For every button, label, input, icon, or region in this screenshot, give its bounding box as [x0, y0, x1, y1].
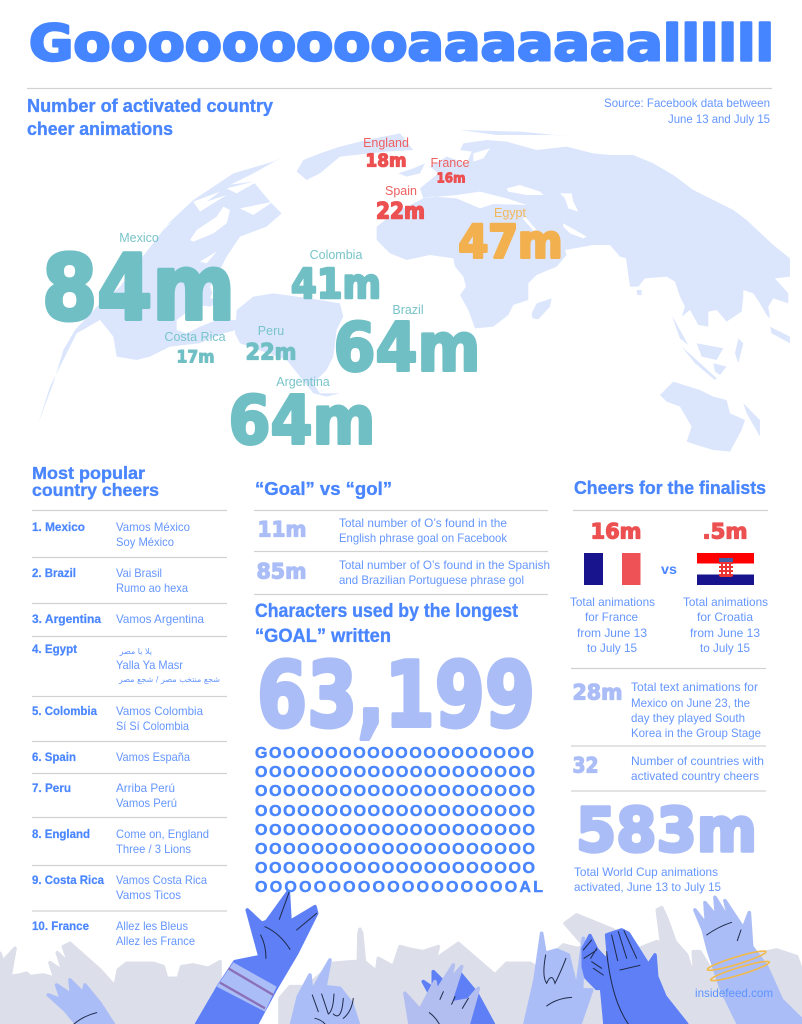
panel: most popular country cheers: [32, 463, 227, 948]
Croatia total: from June 13: [690, 626, 760, 640]
stat: 583m total: 583m: [576, 795, 757, 866]
icon: Croatian flag: [697, 553, 754, 585]
stat: 28m: [572, 680, 761, 740]
Croatia total: Total animations: [683, 595, 768, 609]
title: Goooooooooaaaaaaallllll: [29, 15, 774, 73]
map label: England: 18m: [366, 151, 406, 171]
source note: June 13 and July 15: [668, 112, 770, 126]
row: Spain: [32, 750, 190, 764]
map label: England: [363, 136, 409, 171]
Croatia total: for Croatia: [697, 610, 753, 624]
row: England: Come on, England: [116, 827, 209, 841]
stat: 583m total: activated, June 13 to July 15: [574, 880, 721, 894]
row: Spain: 6. Spain: [32, 752, 76, 764]
stat: 11m: Total number of O’s found in the: [339, 516, 507, 530]
subtitle: number of activated country cheer animations: Number of activated country: [27, 96, 273, 116]
map label: Peru: 22m: [246, 339, 296, 365]
map label: Mexico: Mexico: [119, 231, 159, 245]
versus label: vs: [661, 561, 677, 577]
longest goal text block: OOOOOOOOOOOOOOOOOOOO: [255, 783, 535, 800]
map label: Egypt: Egypt: [494, 206, 527, 220]
heading: characters used by longest goal: “GOAL” written: [255, 626, 391, 647]
map label: Peru: [246, 324, 296, 365]
heading: characters used by longest goal: [255, 601, 519, 647]
row: France: Allez les France: [116, 934, 195, 948]
light blue rock-sign hand: [525, 933, 592, 1024]
map label: Argentina: 64m: [228, 382, 376, 460]
row: Argentina: [32, 612, 204, 626]
heading: most popular country cheers: country cheers: [32, 480, 159, 500]
subtitle: number of activated country cheer animations: cheer animations: [27, 119, 173, 139]
map label: Brazil: Brazil: [392, 303, 424, 317]
subtitle: number of activated country cheer animations: [27, 96, 273, 139]
row: France: 10. France: [32, 921, 89, 933]
row: Brazil: [32, 566, 188, 595]
map label: Colombia: 41m: [291, 260, 381, 308]
row: England: [32, 827, 209, 856]
dark blue clapping hands: [583, 930, 687, 1024]
light blue hand with gold bracelets: [695, 897, 802, 1024]
row: Spain: Vamos España: [116, 750, 190, 764]
France total: Total animations: [570, 595, 655, 609]
panel: Goal vs gol: [254, 479, 550, 896]
map label: Brazil: 64m: [334, 308, 480, 386]
row: England: Three / 3 Lions: [116, 842, 191, 856]
row: Brazil: 2. Brazil: [32, 568, 76, 580]
map label: Spain: 22m: [376, 198, 425, 224]
stat: 28m: Korea in the Group Stage: [631, 726, 761, 740]
map label: Costa Rica: Costa Rica: [164, 330, 226, 344]
source note: Source: Facebook data between: [604, 96, 770, 110]
stat: 85m: and Brazilian Portuguese phrase gol: [339, 573, 524, 587]
stat: 28m: day they played South: [631, 711, 745, 725]
row: Costa Rica: Vamos Costa Rica: [116, 873, 207, 887]
row: Peru: Arriba Perú: [116, 781, 175, 795]
panel: cheers for the finalists: [570, 478, 768, 894]
map label: Costa Rica: [164, 330, 226, 366]
longest goal text block: OOOOOOOOOOOOOOOOOOOO: [255, 841, 535, 858]
map label: England: England: [363, 136, 409, 150]
stat: 32: [572, 753, 764, 783]
map label: Argentina: Argentina: [276, 375, 330, 389]
map label: Egypt: 47m: [458, 216, 562, 268]
Croatia total: [683, 519, 768, 655]
longest goal text block: OOOOOOOOOOOOOOOOOOOO: [255, 764, 535, 781]
stat: 32: activated country cheers: [631, 769, 759, 783]
stat: 583m total: Total World Cup animations: [574, 865, 718, 879]
map label: Spain: Spain: [385, 184, 417, 198]
grey background hands: [0, 908, 802, 1024]
row: Mexico: Vamos México: [116, 520, 190, 534]
row: Colombia: [32, 704, 203, 733]
source note: [604, 96, 770, 126]
row: Argentina: Vamos Argentina: [116, 612, 204, 626]
longest goal text block: OOOOOOOOOOOOOOOOOOOO: [255, 822, 535, 839]
row: Mexico: [32, 520, 190, 549]
light blue hand, far left: [48, 980, 113, 1024]
row: Costa Rica: 9. Costa Rica: [32, 875, 105, 887]
row: Argentina: 3. Argentina: [32, 614, 102, 626]
map label: France: 16m: [436, 170, 466, 186]
crowd of raised hands: [0, 892, 802, 1024]
France total: to July 15: [587, 641, 637, 655]
stat: 583m total: [574, 795, 757, 894]
France total: 16m: [590, 519, 642, 543]
stat: 11m: English phrase goal on Facebook: [339, 531, 508, 545]
row: Brazil: Vai Brasil: [116, 566, 162, 580]
row: Colombia: 5. Colombia: [32, 706, 98, 718]
stat: 32: 32: [572, 753, 598, 777]
map label: Mexico: 84m: [42, 236, 235, 341]
Croatia total: .5m: [702, 519, 748, 543]
map label: France: [431, 156, 469, 186]
stat: 85m: Total number of O’s found in the Spanish: [339, 558, 550, 572]
row: Mexico: Soy México: [116, 535, 174, 549]
row: France: Allez les Bleus: [116, 919, 188, 933]
light blue hand, centre left: [292, 960, 358, 1024]
stat: 85m: [256, 558, 550, 587]
row: Brazil: Rumo ao hexa: [116, 581, 188, 595]
overlapping dark and light hands, centre: [405, 965, 493, 1024]
map label: Spain: [376, 184, 425, 224]
world map: [38, 130, 790, 452]
heading: characters used by longest goal: Characters used by the longest: [255, 601, 519, 622]
row: Peru: [32, 781, 177, 810]
longest goal text block: OOOOOOOOOOOOOOOOOOAL: [255, 879, 543, 896]
row: Egypt: 4. Egypt: [32, 644, 77, 656]
longest goal text block: GOOOOOOOOOOOOOOOOOOO: [255, 745, 534, 762]
dark blue raised arm with striped wristband: [197, 892, 317, 1024]
France total: [570, 519, 655, 655]
heading: most popular country cheers: [32, 463, 159, 500]
row: England: 8. England: [32, 829, 90, 841]
map label: France: France: [431, 156, 469, 170]
heading: cheers for the finalists: Cheers for the finalists: [574, 478, 766, 498]
row: Egypt: [32, 644, 220, 684]
big number: 63,199: 63,199: [257, 643, 535, 748]
heading: most popular country cheers: Most popular: [32, 463, 145, 483]
row: Egypt: يلا يا مصر: [119, 647, 152, 656]
heading: Goal vs gol: “Goal” vs “gol”: [255, 479, 392, 499]
row: France: [32, 919, 195, 948]
row: Costa Rica: Vamos Ticos: [116, 888, 181, 902]
row: Colombia: Vamos Colombia: [116, 704, 203, 718]
row: Colombia: Sí Sí Colombia: [116, 719, 189, 733]
stat: 85m: 85m: [256, 559, 306, 583]
longest goal text block: OOOOOOOOOOOOOOOOOOOO: [255, 860, 535, 877]
website credit: insidefeed.com: [695, 986, 773, 1000]
map label: Peru: Peru: [258, 324, 284, 338]
row: Costa Rica: [32, 873, 207, 902]
stat: 28m: Mexico on June 23, the: [631, 696, 750, 710]
France total: for France: [585, 610, 638, 624]
row: Peru: 7. Peru: [32, 783, 71, 795]
longest goal text block: OOOOOOOOOOOOOOOOOOOO: [255, 803, 535, 820]
row: Egypt: شجع منتخب مصر / شجع مصر: [118, 675, 220, 684]
map label: Costa Rica: 17m: [176, 348, 214, 366]
longest goal text block: [255, 745, 543, 896]
row: Egypt: Yalla Ya Masr: [116, 658, 183, 672]
stat: 11m: 11m: [258, 517, 306, 541]
stat: 11m: [258, 516, 508, 545]
stat: 28m: Total text animations for: [631, 680, 758, 694]
row: Mexico: 1. Mexico: [32, 522, 85, 534]
stat: 28m: 28m: [572, 680, 622, 704]
France total: from June 13: [577, 626, 647, 640]
stat: 32: Number of countries with: [631, 754, 764, 768]
icon: French flag: [584, 553, 640, 585]
map label: Colombia: Colombia: [310, 248, 362, 262]
row: Peru: Vamos Perú: [116, 796, 177, 810]
Croatia total: to July 15: [700, 641, 750, 655]
